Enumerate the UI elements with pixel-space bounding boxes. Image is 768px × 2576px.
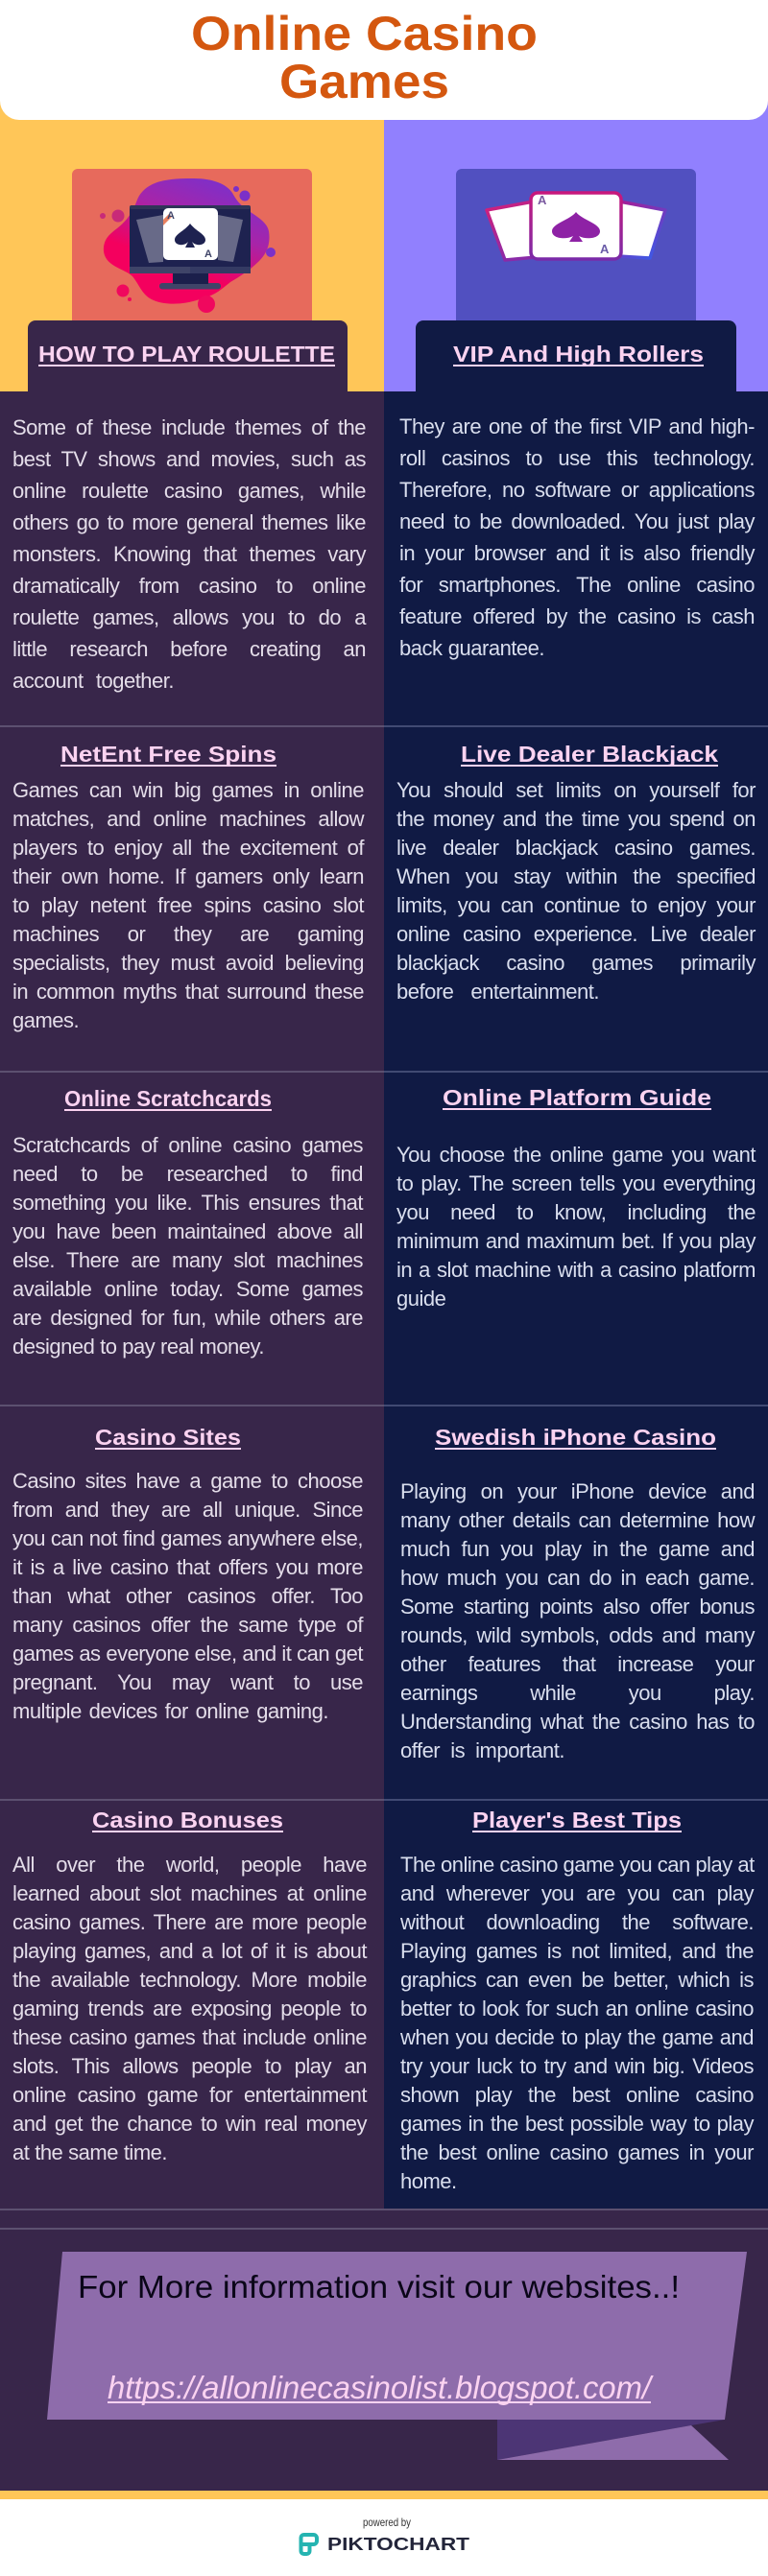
text block: roulette games, allows you to do a bbox=[12, 605, 366, 629]
logo: powered by Piktochart: PIKTOCHART bbox=[327, 2535, 469, 2554]
panel: how to play roulette text bbox=[0, 391, 384, 726]
heading: HOW TO PLAY ROULETTE bbox=[38, 342, 335, 366]
text block: little research before creating an bbox=[12, 637, 366, 661]
text block: when you decide to play the game and bbox=[400, 2025, 754, 2049]
text block: games in the best possible way to play bbox=[400, 2112, 754, 2136]
text block: playing games, and a lot of it is about bbox=[12, 1939, 367, 1963]
logo: powered by Piktochart: powered by bbox=[363, 2516, 411, 2529]
text block: to play. The screen tells you everything bbox=[396, 1171, 756, 1195]
panel: indigo illustration card bbox=[456, 169, 696, 332]
text block: else. There are many slot machines bbox=[12, 1248, 363, 1272]
text block: Scratchcards of online casino games bbox=[12, 1133, 363, 1157]
panel: footer call to action bbox=[0, 2209, 768, 2491]
panel: Swedish iPhone Casino bbox=[384, 1406, 768, 1800]
panel: yellow left backdrop bbox=[0, 96, 384, 393]
text block: you need to know, including the bbox=[396, 1200, 756, 1224]
text block: without downloading the software. bbox=[400, 1910, 754, 1934]
text block: at the same time. bbox=[12, 2140, 167, 2164]
text block: Some of these include themes of the bbox=[12, 415, 366, 439]
text block: you have been maintained above all bbox=[12, 1219, 363, 1243]
text block: roll casinos to use this technology. bbox=[399, 446, 755, 470]
text block: the best online casino games in your bbox=[400, 2140, 754, 2164]
panel: coral illustration card bbox=[72, 169, 312, 332]
text block: multiple devices for online gaming. bbox=[12, 1699, 328, 1723]
heading: Player's Best Tips bbox=[472, 1808, 682, 1832]
text block: something you like. This ensures that bbox=[12, 1191, 363, 1215]
text block: account together. bbox=[12, 669, 174, 693]
panel: Player's Best Tips bbox=[384, 1800, 768, 2210]
text block: home. bbox=[400, 2169, 457, 2193]
panel: Casino Sites bbox=[0, 1406, 384, 1800]
text block: for smartphones. The online casino bbox=[399, 573, 755, 597]
text block bbox=[12, 415, 367, 693]
text block: in common myths that surround these bbox=[12, 980, 364, 1004]
text block bbox=[12, 1469, 364, 1723]
panel: title header bbox=[0, 0, 768, 120]
heading: NetEnt Free Spins bbox=[60, 742, 276, 767]
text block: All over the world, people have bbox=[12, 1853, 367, 1877]
text block: minimum and maximum bet. If you play bbox=[396, 1229, 756, 1253]
text block: are designed for fun, while others are bbox=[12, 1306, 363, 1330]
text block: how much you can do in each game. bbox=[400, 1566, 755, 1590]
icon: monitor with ace of spades bbox=[100, 178, 276, 313]
text block: The online casino game you can play at bbox=[400, 1853, 755, 1877]
text block: online casino experience. Live dealer bbox=[396, 922, 756, 946]
text block: games. bbox=[12, 1008, 79, 1032]
text block bbox=[396, 1143, 756, 1311]
heading: VIP And High Rollers bbox=[453, 342, 704, 366]
text block: try your luck to try and win big. Videos bbox=[400, 2054, 754, 2078]
text block: offer is important. bbox=[400, 1738, 564, 1762]
text block: online casino game for entertainment bbox=[12, 2083, 367, 2107]
panel: Online Scratchcards bbox=[0, 1072, 384, 1406]
text block: online roulette casino games, while bbox=[12, 479, 366, 503]
title: Games bbox=[279, 55, 449, 108]
text block: Games can win big games in online bbox=[12, 778, 364, 802]
text block: to play netent free spins casino slot bbox=[12, 893, 364, 917]
panel: NetEnt Free Spins bbox=[0, 726, 384, 1072]
text block: specialists, they must avoid believing bbox=[12, 951, 364, 975]
text block: players to enjoy all the excitement of bbox=[12, 836, 364, 860]
text block bbox=[12, 778, 365, 1032]
text block: from and they are all unique. Since bbox=[12, 1498, 363, 1522]
text block: learned about slot machines at online bbox=[12, 1881, 367, 1905]
text block: slots. This allows people to play an bbox=[12, 2054, 367, 2078]
text block: and get the chance to win real money bbox=[12, 2112, 367, 2136]
heading: Online Scratchcards bbox=[64, 1086, 272, 1111]
text block: Playing games is not limited, and the bbox=[400, 1939, 754, 1963]
text block: in a slot machine with a casino platform bbox=[396, 1258, 756, 1282]
text block bbox=[399, 414, 755, 660]
heading: Live Dealer Blackjack bbox=[461, 742, 718, 767]
text block: you can not find games anywhere else, bbox=[12, 1526, 363, 1550]
text block: need to be downloaded. You just play bbox=[399, 509, 755, 533]
title: Online Casino bbox=[191, 7, 538, 60]
text block: and wherever you are you can play bbox=[400, 1881, 754, 1905]
text block: Therefore, no software or applications bbox=[399, 478, 755, 502]
text block: in your browser and it is also friendly bbox=[399, 541, 755, 565]
text block: You choose the online game you want bbox=[396, 1143, 756, 1167]
text block bbox=[12, 1853, 367, 2164]
text block: the money and the time you spend on bbox=[396, 807, 756, 831]
text block: many other details can determine how bbox=[400, 1508, 755, 1532]
text block bbox=[400, 1479, 755, 1762]
text block: Some starting points also offer bonus bbox=[400, 1595, 755, 1619]
text block bbox=[396, 778, 756, 1004]
text block bbox=[400, 1853, 755, 2193]
panel: Live Dealer Blackjack bbox=[384, 726, 768, 1072]
text block: guide bbox=[396, 1287, 445, 1311]
callout: ribbon banner with link: https://allonlinecasinolist.blogspot.com/ bbox=[108, 2370, 654, 2405]
text block: feature offered by the casino is cash bbox=[399, 604, 755, 628]
icon: three playing cards: A bbox=[538, 193, 547, 207]
text block: casino games. There are more people bbox=[12, 1910, 367, 1934]
title bbox=[191, 7, 538, 108]
text block: limits, you can continue to enjoy your bbox=[396, 893, 756, 917]
text block: You should set limits on yourself for bbox=[396, 778, 756, 802]
text block: many casinos offer the same type of bbox=[12, 1613, 363, 1637]
text block: best TV shows and movies, such as bbox=[12, 447, 366, 471]
panel: violet right backdrop bbox=[384, 96, 768, 393]
text block: better to look for such an online casino bbox=[400, 1997, 754, 2021]
text block bbox=[12, 1133, 363, 1359]
text block: it is a live casino that offers you more bbox=[12, 1555, 363, 1579]
text block: games as everyone else, and it can get bbox=[12, 1642, 363, 1666]
text block: dramatically from casino to online bbox=[12, 574, 366, 598]
text block: Understanding what the casino has to bbox=[400, 1710, 755, 1734]
text block: earnings while you play. bbox=[400, 1681, 755, 1705]
icon: three playing cards: A bbox=[600, 242, 610, 256]
text block: live dealer blackjack casino games. bbox=[396, 836, 756, 860]
text block: need to be researched to find bbox=[12, 1162, 363, 1186]
text block: graphics can even be better, which is bbox=[400, 1968, 754, 1992]
heading: Casino Sites bbox=[95, 1425, 241, 1450]
text block: other features that increase your bbox=[400, 1652, 755, 1676]
panel: Online Platform Guide bbox=[384, 1072, 768, 1406]
text block: They are one of the first VIP and high- bbox=[399, 414, 755, 438]
icon: monitor with ace of spades: A bbox=[204, 248, 212, 260]
panel: Casino Bonuses bbox=[0, 1800, 384, 2210]
heading: Online Platform Guide bbox=[443, 1085, 711, 1110]
text block: back guarantee. bbox=[399, 636, 544, 660]
text block: than what other casinos offer. Too bbox=[12, 1584, 363, 1608]
text block: others go to more general themes like bbox=[12, 510, 366, 534]
panel: section tab left bbox=[28, 320, 348, 393]
panel: VIP text bbox=[384, 391, 768, 726]
text block: gaming trends are exposing people to bbox=[12, 1997, 367, 2021]
icon: monitor with ace of spades: A bbox=[167, 210, 175, 222]
panel: section tab right bbox=[416, 320, 736, 393]
text block: designed to pay real money. bbox=[12, 1335, 264, 1359]
text block: these casino games that include online bbox=[12, 2025, 367, 2049]
text block: blackjack casino games primarily bbox=[396, 951, 756, 975]
text block: shown play the best online casino bbox=[400, 2083, 754, 2107]
text block: their own home. If gamers only learn bbox=[12, 864, 364, 888]
text block: before entertainment. bbox=[396, 980, 599, 1004]
icon: three playing cards bbox=[485, 191, 667, 262]
heading: Swedish iPhone Casino bbox=[435, 1425, 716, 1450]
text block: Playing on your iPhone device and bbox=[400, 1479, 755, 1503]
callout: ribbon banner with link: For More information visit our websites..! bbox=[78, 2269, 680, 2304]
text block: much fun you play in the game and bbox=[400, 1537, 755, 1561]
text block: the available technology. More mobile bbox=[12, 1968, 367, 1992]
text block: monsters. Knowing that themes vary bbox=[12, 542, 366, 566]
text block: Casino sites have a game to choose bbox=[12, 1469, 363, 1493]
text block: rounds, wild symbols, odds and many bbox=[400, 1623, 755, 1647]
heading: Casino Bonuses bbox=[92, 1808, 283, 1832]
logo: powered by Piktochart bbox=[300, 2516, 469, 2556]
text block: When you stay within the specified bbox=[396, 864, 756, 888]
text block: available online today. Some games bbox=[12, 1277, 363, 1301]
text block: pregnant. You may want to use bbox=[12, 1670, 363, 1694]
text block: machines or they are gaming bbox=[12, 922, 364, 946]
text block: matches, and online machines allow bbox=[12, 807, 364, 831]
